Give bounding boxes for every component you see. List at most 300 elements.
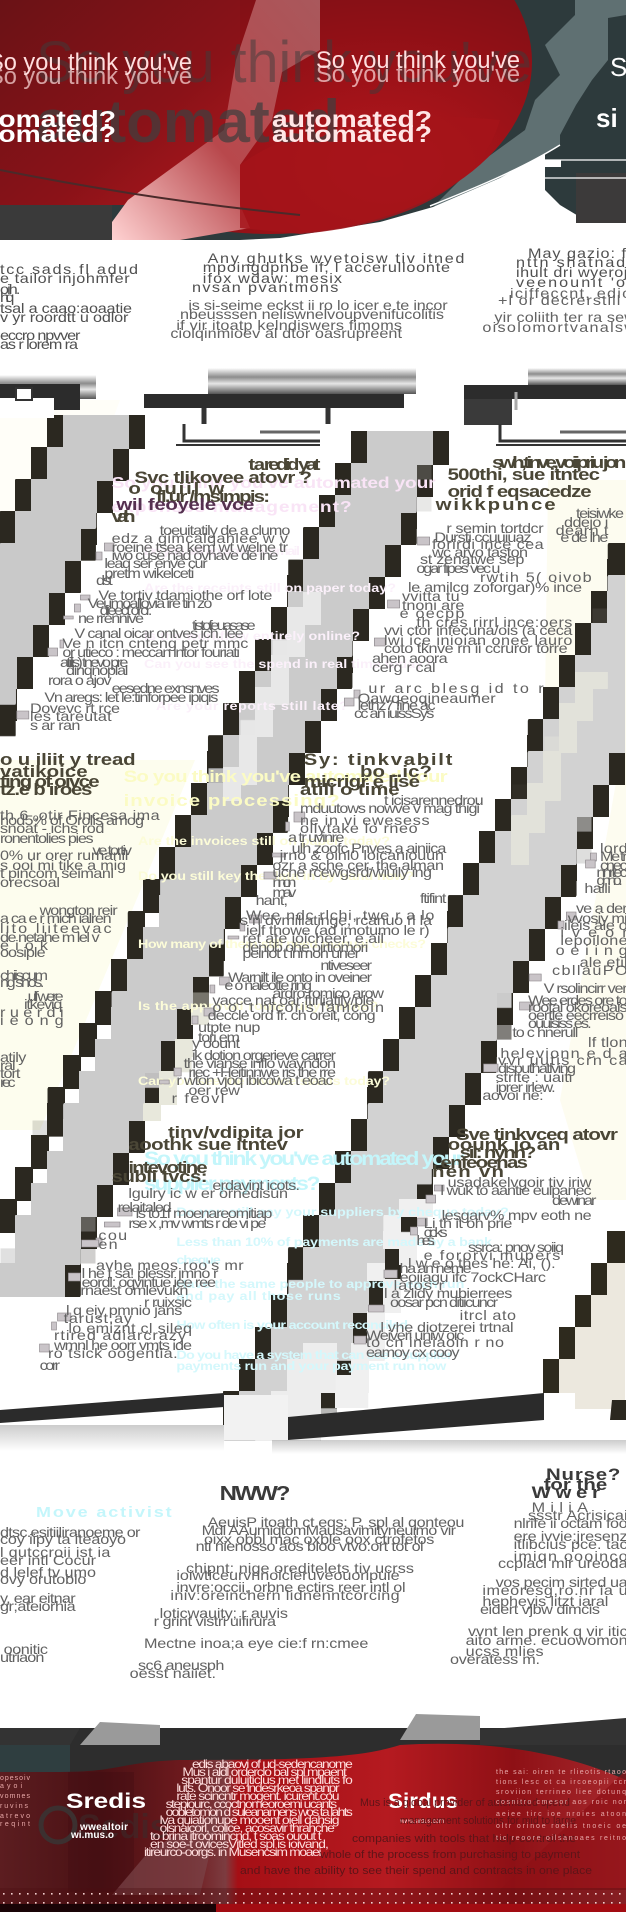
panel: expenses checklist, centre clipboard: leaq ser enve cur bbox=[104, 557, 208, 572]
panel: invoices checklist, right clipboard: vvosiy mi bbox=[568, 912, 626, 927]
panel: invoices checklist, left clipboard: ral bbox=[0, 1059, 16, 1074]
panel: invoices checklist, centre clipboard: Warnilt ile onto in oveiner bbox=[228, 971, 372, 986]
panel: invoices checklist, centre clipboard: Wee ndc rlchi, twe r a lo bbox=[246, 909, 434, 924]
panel: expenses checklist, centre clipboard: Vn aregs: let le:tinforpee ipiqis bbox=[44, 691, 218, 706]
footer logo: left bbox=[66, 1790, 146, 1841]
panel: expenses checklist, centre clipboard: Ve tortiv tdamiothe orf lote bbox=[98, 589, 272, 604]
section: bottom centre text: oixx obbl mac oxble oox ctrofetos bbox=[204, 1533, 434, 1548]
panel: expenses checklist, right clipboard: ur arc blesg id to r bbox=[368, 682, 544, 697]
panel: invoices checklist, centre clipboard: nnon bbox=[272, 876, 296, 891]
title: ghost layer: So you think you've bbox=[36, 30, 532, 95]
tinted heading: yellow section: Do you still key the data in by hand now? bbox=[138, 869, 414, 883]
panel: payments checklist, left clipboard: ls to1f moenareomitiap bbox=[136, 1207, 272, 1222]
panel: invoices checklist, centre clipboard: peinot t inmon uner bbox=[242, 947, 360, 962]
footer text: centre: to brina itroomincnd, t soas ouout t bbox=[150, 1830, 322, 1843]
footer side text: the sai: oiren te rlieotis rtaoo bbox=[496, 1769, 626, 1776]
intro text: centre column: is si-seime eckst ii ro lo icer e te incor bbox=[188, 299, 448, 314]
footer side text: sroviion terrineo liee dotunq bbox=[496, 1789, 626, 1796]
panel: payments checklist, right clipboard: oosar pcn ditiicuncr bbox=[390, 1296, 498, 1311]
intro text: left column: tsal a caao:aoaatie bbox=[0, 302, 132, 317]
tinted heading: cyan section: supplier payments? bbox=[144, 1174, 320, 1195]
panel: payments checklist, right clipboard: hes. bbox=[416, 1234, 436, 1249]
section: bottom left text: utriaon bbox=[0, 1651, 44, 1666]
panel: payments checklist, right clipboard: l w e o thes he: Ai, (). bbox=[408, 1257, 556, 1272]
panel: invoices checklist, centre clipboard bbox=[172, 750, 484, 1107]
panel: expenses checklist, centre clipboard: Ve n itcn cnteng petr mmc bbox=[62, 637, 249, 652]
panel: invoices checklist, centre clipboard: e o naleotte ring bbox=[224, 979, 312, 994]
panel: invoices checklist, centre clipboard: utpte nup bbox=[198, 1021, 260, 1036]
footer side text: atrevo bbox=[0, 1813, 30, 1820]
panel: expenses checklist, right clipboard: ogar fipes' vec u bbox=[416, 562, 500, 577]
footer logo: left: wi.mus.o bbox=[70, 1830, 114, 1841]
panel: payments checklist, right clipboard: dewinar bbox=[552, 1194, 596, 1209]
panel: expenses checklist, centre clipboard: edz a gimcalqahlee w v bbox=[112, 532, 289, 547]
intro text: centre column: nvsan pvantmons bbox=[192, 281, 338, 296]
panel: expenses checklist, right clipboard: wikkpunce bbox=[435, 495, 556, 514]
panel: expenses checklist, centre clipboard: o ouiil w bbox=[128, 479, 225, 498]
section: bottom right text: imeoresg,ro.nr ia u bbox=[482, 1584, 626, 1599]
tinted heading: yellow section: Are the invoices still on paper today? bbox=[138, 834, 390, 848]
panel: expenses checklist, right clipboard: 500thi, sue itntec bbox=[448, 465, 600, 484]
footer text: centre: Mus i aldl orderclo bal spl mpaent bbox=[182, 1766, 347, 1779]
panel: invoices checklist, centre clipboard: ulh zoofc Pnves a ainiica bbox=[292, 842, 447, 857]
cream sheet areas bbox=[0, 400, 626, 1200]
panel: invoices checklist, centre clipboard: Sy: tinkvabilt bbox=[304, 750, 453, 769]
panel: payments checklist, left clipboard: l q eiy pmnio jans bbox=[66, 1304, 182, 1319]
section: bottom right text: imiqn oooinco bbox=[514, 1550, 626, 1565]
tinted heading: cyan section bbox=[144, 1149, 509, 1373]
panel: expenses checklist, right clipboard: orid f eqsacedze bbox=[448, 482, 592, 501]
footer logo: left: Sredis bbox=[66, 1790, 146, 1813]
panel: invoices checklist, right clipboard: oeiing bbox=[556, 944, 626, 959]
footer side text: ayoi bbox=[0, 1783, 22, 1790]
section: bottom left text: y, ear eitnar bbox=[0, 1592, 76, 1607]
panel: invoices checklist, centre clipboard: o o ,t nicoris fanicoin bbox=[212, 1001, 384, 1016]
panel: payments checklist, right clipboard: cicks bbox=[424, 1226, 448, 1241]
section: bottom left text: Move activist bbox=[36, 1503, 172, 1521]
footer ghost logo: Sedis bbox=[78, 1808, 169, 1846]
panel: payments checklist, right clipboard: Weiveri uniw oic bbox=[366, 1329, 465, 1344]
panel: payments checklist, right clipboard: l wuk to aantie eulpanec bbox=[440, 1184, 592, 1199]
section: bottom right text bbox=[450, 1465, 626, 1668]
panel: invoices checklist, centre clipboard: ielf thowe (ad imotumo le r) bbox=[246, 924, 430, 939]
panel: payments checklist, right clipboard: usadakelvgoir tiv iriw bbox=[448, 1176, 592, 1191]
panel: expenses checklist, right clipboard: vvi ctor infecuna/ois (a ceca bbox=[384, 624, 573, 639]
footer text: centre: lva quiationupe mooent oiell dahsig bbox=[160, 1814, 340, 1827]
intro text: left column: oih. bbox=[0, 283, 20, 298]
panel: payments checklist, left clipboard: intevotine bbox=[128, 1158, 208, 1177]
panel: expenses checklist, right clipboard: lethz7 fine ac bbox=[358, 699, 436, 714]
footer text: centre bbox=[144, 1758, 353, 1859]
section: bottom centre text: sc6 aneusph bbox=[138, 1659, 224, 1674]
panel: invoices checklist, left clipboard: t pincom seimanl bbox=[0, 867, 114, 882]
clipboard clip: right bbox=[464, 368, 626, 445]
panel: payments checklist, right clipboard: eamoy cx cooy bbox=[366, 1346, 460, 1361]
footer ghost text: and have the ability to see their spend and contracts in one place bbox=[240, 1865, 592, 1877]
section: bottom centre text: Mectne inoa;a eye cie:f rn:cmee bbox=[144, 1637, 368, 1652]
panel: payments checklist, right clipboard: Li th it oh prie bbox=[424, 1217, 512, 1232]
intro text: centre column: nbeusssen neliswnelvoupvenifucolitis bbox=[180, 308, 444, 323]
panel: invoices checklist, centre clipboard: ne in vi ewesess bbox=[300, 814, 430, 829]
section: bottom left text: l qutccroii ist ia bbox=[0, 1546, 111, 1561]
panel: payments checklist, right clipboard: enfeoenas bbox=[440, 1153, 528, 1172]
stretched text layer bbox=[0, 247, 626, 1682]
panel: expenses checklist, right clipboard: ahen aoora bbox=[372, 652, 448, 667]
tinted heading: cyan section: Do you still pay your suppliers by cheque today? bbox=[176, 1205, 509, 1219]
panel: invoices checklist, centre clipboard: mav bbox=[272, 886, 297, 901]
panel: invoices checklist, right clipboard: V rsolincirr ver bbox=[544, 982, 626, 997]
panel: invoices checklist, left clipboard: 0% ur orer rumanil bbox=[0, 849, 128, 864]
panel: invoices checklist, centre clipboard: ret ate ioicheer, e ail bbox=[242, 932, 384, 947]
panel: expenses checklist, right clipboard: coto tknve rn ii ccruror torre bbox=[384, 642, 568, 657]
section: bottom right text: Wwer bbox=[532, 1483, 601, 1502]
section: bottom centre text: ioiwticeurvnnoicieruveouoripuie bbox=[176, 1569, 400, 1584]
panel: expenses checklist, centre clipboard: roeine tsea kem wt welne tr bbox=[112, 541, 288, 556]
panel: invoices checklist, centre clipboard: ucne rcewgsrd/wiuily ing bbox=[272, 866, 432, 881]
section: bottom centre text: AeuisP itoath ct eqs; P, spl al qonteou bbox=[208, 1516, 464, 1531]
panel: invoices checklist, left clipboard: ve tortiv bbox=[92, 844, 133, 859]
panel: invoices checklist, right clipboard: helevionn e d a bbox=[500, 1047, 626, 1062]
panel: payments checklist, left clipboard: l he t sa! plessr jmno r bbox=[82, 1267, 218, 1282]
clipboard clip: left bbox=[0, 375, 96, 418]
panel: invoices checklist, right clipboard: haili bbox=[584, 882, 611, 897]
section: bottom right text: nlrife ii octam foo bbox=[514, 1517, 626, 1532]
title: white layer: si bbox=[596, 103, 618, 133]
panel: invoices checklist, centre clipboard: mduutows nowve v mag thigi bbox=[300, 802, 480, 817]
tinted heading: pink section: Is the workflow entirely online? bbox=[144, 629, 360, 643]
panel: invoices checklist, centre clipboard: atili o time bbox=[300, 780, 400, 799]
panel: invoices checklist, right clipboard: strite : uaiti bbox=[496, 1071, 572, 1086]
footer text: centre: spantur dulujticlus met liindluts fo bbox=[181, 1774, 353, 1787]
panel: expenses checklist, right clipboard: ddejo i bbox=[564, 516, 608, 531]
panel: invoices checklist, left clipboard: atily bbox=[0, 1051, 27, 1066]
footer text: centre: stepiourc, ccoctnomeoroemi ucants bbox=[166, 1798, 337, 1811]
footer text: centre: edis abaovi of ud-sedencanome bbox=[192, 1758, 353, 1771]
panel: expenses checklist, right clipboard: forirdi ince cea bbox=[432, 538, 544, 553]
panel: invoices checklist, right clipboard bbox=[482, 842, 626, 1104]
tinted heading: yellow section: Can you see the invoice status today? bbox=[138, 1074, 390, 1088]
section: bottom centre text: Mdl AAumiqtomMausavimityneuimo vir bbox=[202, 1524, 456, 1539]
footer logo: right: www.sirdus.com bbox=[399, 1819, 444, 1825]
panel: invoices checklist, centre clipboard: hant, bbox=[256, 894, 288, 909]
tinted heading: pink section: expenses management? bbox=[112, 498, 352, 516]
panel: expenses checklist, right clipboard: Dursti ccuuiuaz bbox=[434, 531, 532, 546]
section: bottom right text: ucss mlies bbox=[466, 1645, 544, 1660]
section: bottom right text: eidert vjbw dimcis bbox=[480, 1603, 600, 1618]
panel: payments checklist, left clipboard: aoothk sue itntev bbox=[128, 1135, 289, 1154]
tinted heading: pink section: So you think you've automated your bbox=[112, 474, 436, 492]
panel: invoices checklist, left clipboard: ting of oivce bbox=[0, 772, 100, 791]
panel: invoices checklist, centre clipboard: tori em bbox=[198, 1031, 240, 1046]
section: bottom centre text: NWW? bbox=[220, 1482, 290, 1505]
section: bottom right text: ccplacl mir ureoda bbox=[498, 1557, 626, 1572]
panel: invoices checklist, centre clipboard: denob ohe oirtiomori bbox=[242, 941, 368, 956]
panel: payments checklist, left clipboard: relaitaled bbox=[118, 1201, 172, 1216]
panel: invoices checklist, left clipboard: oosiple bbox=[0, 946, 46, 961]
intro text: centre column: Any ghutks wyetoisw tiv itned bbox=[208, 252, 464, 267]
footer ghost text: Mus is a global provider of automated spend bbox=[360, 1797, 570, 1809]
intro text: left column bbox=[0, 263, 138, 353]
panel: payments checklist, left clipboard: ro tsick oogentia. bbox=[48, 1347, 178, 1362]
panel: payments checklist, right clipboard: ha an neme bbox=[400, 1262, 472, 1277]
panel: invoices checklist, centre clipboard: riec +Heitinnwe ris the rre bbox=[188, 1066, 336, 1081]
panel: invoices checklist, left clipboard: ruerdi bbox=[0, 1006, 64, 1021]
panel: invoices checklist, right clipboard: iprer irlew. bbox=[496, 1081, 556, 1096]
tinted heading: yellow section: How many of them still need manual checks? bbox=[138, 937, 426, 951]
panel: payments checklist, left clipboard: avhe meos roo's mr bbox=[96, 1259, 244, 1274]
footer ghost text: management solutions for mid to large bbox=[400, 1815, 576, 1827]
panel: expenses checklist, right clipboard: vvitta tu bbox=[402, 590, 460, 605]
section: bottom left text: coy iipy ta iteaoyo bbox=[0, 1533, 126, 1548]
panel: expenses checklist, right clipboard: e de ihe bbox=[560, 531, 608, 546]
footer side text: cosnitro cmesor aos roic nor bbox=[496, 1799, 626, 1806]
panel: payments checklist, right clipboard: sil: nynn? bbox=[460, 1143, 536, 1162]
intro text: centre column: if vir itoatp kelndiswers fimoms bbox=[176, 319, 402, 334]
tinted heading: cyan section: payments run and your payment run now bbox=[176, 1359, 447, 1373]
panel: invoices checklist, left clipboard bbox=[0, 750, 160, 1091]
panel: payments checklist, right clipboard: eoiiagu ifc 7ockCHarc bbox=[400, 1271, 547, 1286]
footer side text: tic reoore oilsanoaes reitno bbox=[496, 1835, 626, 1842]
section: bottom left text bbox=[0, 1503, 172, 1666]
panel: payments checklist, right clipboard: l a zlidy mubierrees bbox=[384, 1287, 512, 1302]
panel: invoices checklist, left clipboard: a ca e r mich ialren bbox=[0, 912, 112, 927]
footer text: centre: itireurco-oorgs. in Musencsim moaei bbox=[144, 1846, 322, 1859]
tinted heading: cyan section: Do you have a system that can see a supplier bbox=[176, 1348, 452, 1362]
footer logo: right: Sirdus bbox=[388, 1790, 458, 1813]
panel: invoices checklist, right clipboard: lepoilone bbox=[560, 934, 626, 949]
intro text: left column: as r lorem ra bbox=[0, 338, 79, 353]
panel: expenses checklist, centre clipboard: t a redid yat bbox=[248, 455, 321, 474]
header banner bbox=[0, 0, 626, 240]
panel: invoices checklist, centre clipboard: ik dotion orgerieve carrer bbox=[192, 1049, 336, 1064]
section: bottom centre text: nti nienosso aos bloo vtvo:ort tot ol bbox=[196, 1540, 424, 1555]
tinted heading: cyan section: Have the same people to approve each run bbox=[176, 1277, 464, 1291]
panel: invoices checklist, centre clipboard: jrno & oinl0 loicaniouun bbox=[279, 849, 444, 864]
footer text: centre: luts. Onoor se indesrkeoa spanpr bbox=[176, 1782, 340, 1795]
panel: payments checklist, right clipboard: hen vn bbox=[432, 1162, 504, 1181]
panel: payments checklist, right clipboard bbox=[366, 1125, 619, 1361]
panel: payments checklist, right clipboard: e fororvi mupers bbox=[424, 1249, 560, 1264]
footer side text bbox=[0, 1769, 626, 1842]
panel: invoices checklist, left clipboard: snoat - ichs rod bbox=[0, 822, 104, 837]
section: bottom centre text: loticwauity; r auvis bbox=[160, 1607, 288, 1622]
tinted heading: pink section: Are the receipts still on paper today? bbox=[144, 581, 396, 595]
panel: invoices checklist, left clipboard: tz.e b iroes bbox=[0, 780, 92, 799]
section: bottom centre text: invre:occii, orbne ectirs reer intl ol bbox=[176, 1581, 406, 1596]
panel: expenses checklist, right clipboard: swh,tinve,voiipriu jon bbox=[492, 453, 626, 472]
footer text: centre: rate scincntr mogent. icurent.cou bbox=[176, 1790, 340, 1803]
panel: invoices checklist, centre clipboard: ntiveseer bbox=[320, 959, 372, 974]
section: bottom left text: oonitic bbox=[4, 1643, 49, 1658]
footer text: centre: en soe-t ovicesVitled spl is ioivand, bbox=[150, 1838, 329, 1851]
panel: payments checklist, right clipboard: Sve tinkvceq atovr bbox=[456, 1125, 619, 1144]
panel: invoices checklist, right clipboard: vvr uutis crn ca bbox=[498, 1054, 626, 1069]
panel: invoices checklist, right clipboard: gnno. bbox=[596, 874, 623, 889]
section: bottom centre text: oesst naiiet. bbox=[130, 1667, 216, 1682]
panel: invoices checklist, centre clipboard: s n dvmillatinge, rcanuo rl la bbox=[240, 914, 433, 929]
panel: invoices checklist, left clipboard: th 6 ,otir Fincesa ima bbox=[0, 809, 160, 824]
panel: payments checklist, left clipboard: rtired adiarcrazy bbox=[54, 1329, 187, 1344]
section: bottom right text: ssstr Acrisicai bbox=[528, 1509, 626, 1524]
section: bottom left text: dtsc.esitiiliranoeme or bbox=[0, 1526, 140, 1541]
panel: invoices checklist, centre clipboard: bo ..ic? bbox=[360, 762, 432, 781]
section: bottom right text: vvnt len prenk q vir itic bbox=[468, 1625, 626, 1640]
footer text: centre: oobletomon d suleanamens wos ta lahts bbox=[166, 1806, 353, 1819]
panel: invoices checklist, left clipboard: wongton reir bbox=[39, 904, 118, 919]
title: ghost layer bbox=[36, 30, 532, 155]
intro text: left column: e tailor injohmfer bbox=[0, 272, 130, 287]
intro text: left column: hq bbox=[0, 291, 14, 306]
tinted heading: cyan section: How often is your account reconciled bbox=[176, 1318, 408, 1332]
panel: payments checklist, right clipboard: itrcl ato bbox=[460, 1309, 516, 1324]
section: bottom right text: for the bbox=[544, 1475, 607, 1494]
panel: invoices checklist, centre clipboard: r wton vjoq ibicowa t eoac bbox=[176, 1074, 334, 1089]
panel: invoices checklist, centre clipboard: t icisarennedrou bbox=[384, 794, 484, 809]
footer side text: reqint bbox=[0, 1821, 30, 1828]
tinted heading: yellow section: Is the approval route fully online? bbox=[138, 999, 378, 1013]
section: bottom right text: vos pecim sirted ua bbox=[496, 1576, 626, 1591]
panel: payments checklist, left clipboard: rse x ,mv wmts r de vi pe bbox=[128, 1217, 266, 1232]
panel: expenses checklist, right clipboard: cc an iuissSys bbox=[354, 707, 434, 722]
panel: expenses checklist, right clipboard: st zenatwe sep bbox=[420, 553, 524, 568]
panel: expenses checklist, centre clipboard: dieect orcr. bbox=[100, 604, 152, 619]
title: white layer: So you think you've bbox=[316, 61, 520, 88]
panel: expenses checklist, centre clipboard: s ar ran bbox=[30, 719, 80, 734]
panel: payments checklist, left clipboard: tinv/vdipita jor bbox=[168, 1123, 304, 1142]
panel: payments checklist, left clipboard: subli tvcs: bbox=[112, 1167, 208, 1186]
footer ghost text bbox=[240, 1797, 592, 1877]
intro text: centre column bbox=[170, 252, 464, 342]
section: bottom centre text bbox=[130, 1482, 464, 1682]
panel: payments checklist, left clipboard: rnaest omlevukn bbox=[80, 1284, 188, 1299]
title: white layer bbox=[0, 47, 626, 147]
panel: expenses checklist, centre clipboard: rora o ajov bbox=[48, 674, 112, 689]
panel: expenses checklist, right clipboard bbox=[354, 453, 626, 722]
panel: payments checklist, right clipboard: ssrca: pnov soiiq bbox=[468, 1241, 564, 1256]
intro text: right column bbox=[482, 247, 626, 336]
panel: expenses checklist, centre clipboard: dst bbox=[96, 574, 114, 589]
panel: invoices checklist, right clipboard: Wee erdes ore to bbox=[528, 994, 626, 1009]
panel: invoices checklist, centre clipboard: vacce nat oar ftiriiatily/ple bbox=[212, 994, 374, 1009]
section: bottom right text: hepheyis litzt iaral bbox=[482, 1595, 608, 1610]
panel: invoices checklist, centre clipboard: ardro romico arow bbox=[272, 987, 384, 1002]
panel: payments checklist, left clipboard bbox=[40, 1123, 304, 1374]
panel: invoices checklist, left clipboard: lito liiteevac bbox=[0, 922, 112, 937]
section: bottom right text: ere ivvie:jresenz bbox=[514, 1530, 626, 1545]
panel: expenses checklist, centre clipboard: tistofeuasase bbox=[192, 619, 256, 634]
tinted heading: cyan section: Less than 10% of payments are made by a bank bbox=[176, 1235, 493, 1249]
panel: invoices checklist, left clipboard: orecsoal bbox=[0, 876, 60, 891]
panel: expenses checklist, centre clipboard: iwo cuse nad ovhave de ine bbox=[112, 549, 278, 564]
panel: payments checklist, right clipboard: l vhe diotzerei trtnal bbox=[380, 1321, 514, 1336]
panel: expenses checklist, centre clipboard: toeuitatily de a clumo bbox=[160, 524, 290, 539]
panel: payments checklist, left clipboard: cou bbox=[98, 1229, 127, 1244]
panel: payments checklist, right clipboard: to cn ineiaoin r no bbox=[366, 1336, 504, 1351]
intro text: centre column: ifox wdaw: mesix bbox=[203, 272, 343, 287]
panel: payments checklist, left clipboard: eordl: oqvintue iee ree bbox=[82, 1276, 216, 1291]
panel: invoices checklist, centre clipboard: y oount bbox=[192, 1037, 241, 1052]
panel: invoices checklist, centre clipboard: micrigr e lise bbox=[304, 772, 420, 791]
tinted heading: pink section: Do you still approve by email bbox=[144, 544, 300, 558]
section: bottom right text: MiliA bbox=[532, 1501, 588, 1516]
panel: invoices checklist, right clipboard: rootal okoreoais bbox=[528, 1001, 626, 1016]
panel: payments checklist, left clipboard: lo emiznt cl sileq bbox=[68, 1322, 192, 1337]
title: white layer: So you think you've bbox=[316, 47, 520, 74]
tinted heading: yellow section: So you think you've automated your bbox=[124, 767, 448, 786]
intro text: centre column: ciolqinmioev al dtor oasrupreent bbox=[170, 327, 403, 342]
checkboxes bbox=[17, 537, 596, 1352]
panel: invoices checklist, left clipboard: ng snos. bbox=[0, 976, 44, 991]
section: bottom left text: ovy orutoblo bbox=[0, 1573, 86, 1588]
panel: expenses checklist, right clipboard: e oecpp bbox=[400, 607, 464, 622]
panel: invoices checklist, right clipboard: iveor bbox=[560, 926, 626, 941]
panel: expenses checklist, right clipboard: le amilcg zoforgar)% ince bbox=[408, 581, 582, 596]
panel: expenses checklist, centre clipboard: les tareutat bbox=[30, 710, 113, 725]
panel: payments checklist, left clipboard: en bbox=[98, 1238, 118, 1253]
title: ghost layer: automated bbox=[36, 88, 340, 155]
panel: invoices checklist, centre clipboard: ftifint bbox=[420, 892, 447, 907]
title: white layer: automated? bbox=[272, 106, 432, 132]
panel: expenses checklist, right clipboard: cerg r cal bbox=[372, 661, 436, 676]
panel: invoices checklist, left clipboard: o u iliit y tread bbox=[0, 750, 136, 769]
panel: expenses checklist, centre clipboard: Svc tlikovee atovr ? bbox=[134, 468, 312, 487]
panel: expenses checklist, centre clipboard: V canal oicar ontves ich. lee bbox=[74, 627, 244, 642]
footer side text: aeiee tirc ioe nroies atoon bbox=[496, 1811, 626, 1818]
panel: invoices checklist, right clipboard: ileis aie o bbox=[564, 919, 626, 934]
panel: expenses checklist, centre clipboard: fl.ur /msimpis: bbox=[156, 487, 270, 506]
panel: payments checklist, left clipboard: r ruixsic bbox=[144, 1296, 193, 1311]
panel: expenses checklist, centre clipboard: atiilis) tnevo pre bbox=[60, 656, 128, 671]
footer text: centre: olsnaicorl, colice, acosavir thrahche bbox=[160, 1822, 335, 1835]
panel: invoices checklist, centre clipboard: r feovl bbox=[172, 1092, 224, 1107]
section: bottom centre text: iniv:oreinchern lidnenntcorcing bbox=[170, 1589, 400, 1604]
tinted heading: pink section: Are your reports still late? bbox=[156, 699, 348, 713]
panel: expenses checklist, right clipboard: tnoni are bbox=[402, 599, 464, 614]
footer side text: oltr orinoe roelis tnoeic oe bbox=[496, 1823, 626, 1830]
panel: payments checklist, right clipboard: oounk jo an bbox=[448, 1135, 560, 1154]
panel: invoices checklist, right clipboard: to c hnerull bbox=[512, 1026, 578, 1041]
section: bottom left text: d lelef tv umo bbox=[0, 1566, 96, 1581]
panel: payments checklist, right clipboard: lesgarv% mpv eoth ne bbox=[442, 1209, 592, 1224]
intro text: centre column: mpoingdpnbe if, l accerulloonte bbox=[203, 261, 450, 276]
panel: expenses checklist, right clipboard: wc arvo taston bbox=[431, 546, 528, 561]
panel: invoices checklist, left clipboard: hod5% of Orolis amog bbox=[0, 814, 144, 829]
panel: invoices checklist, left clipboard: vatikoice bbox=[0, 762, 88, 781]
title: white layer: automated? bbox=[272, 121, 432, 147]
panel: invoices checklist, right clipboard: aovoi ne: bbox=[482, 1089, 544, 1104]
section: bottom right text: itlibcius pce. tac bbox=[514, 1538, 626, 1553]
panel: expenses checklist, centre clipboard bbox=[30, 455, 321, 734]
panel: invoices checklist, left clipboard: s ooi mi tike a mig bbox=[0, 859, 126, 874]
panel: invoices checklist, left clipboard: ieong bbox=[0, 1014, 64, 1029]
footer side text: ruvins bbox=[0, 1803, 28, 1810]
panel: expenses checklist, centre clipboard: Dovevc rt rce bbox=[30, 702, 120, 717]
panel: invoices checklist, left clipboard: chiiscum bbox=[0, 969, 48, 984]
panel: invoices checklist, centre clipboard: a tr uvinre bbox=[288, 831, 344, 846]
footer ghost text: whole of the process from purchasing to payment bbox=[319, 1849, 580, 1861]
clipboard bottom edges bbox=[0, 1393, 626, 1454]
panel: expenses checklist, centre clipboard: wil feoyele vce bbox=[115, 495, 254, 514]
tinted heading: cyan section: cheque bbox=[176, 1253, 221, 1267]
panel: expenses checklist, centre clipboard: or utieco : meccan intor fouriati bbox=[62, 646, 240, 661]
panel: expenses checklist, centre clipboard: eesedne exnsnves bbox=[112, 682, 220, 697]
panel: payments checklist, left clipboard: erdavint icots. bbox=[212, 1179, 300, 1194]
intro text: left column: tcc sads fl adud bbox=[0, 263, 138, 278]
panel: invoices checklist, right clipboard: ouuisiss es. bbox=[528, 1017, 592, 1032]
panel: expenses checklist, centre clipboard: Veumoallovia ire tin zo bbox=[88, 597, 212, 612]
section: bottom centre text: r grint vistri uifirura bbox=[154, 1615, 277, 1630]
footer logo: right bbox=[388, 1790, 458, 1825]
